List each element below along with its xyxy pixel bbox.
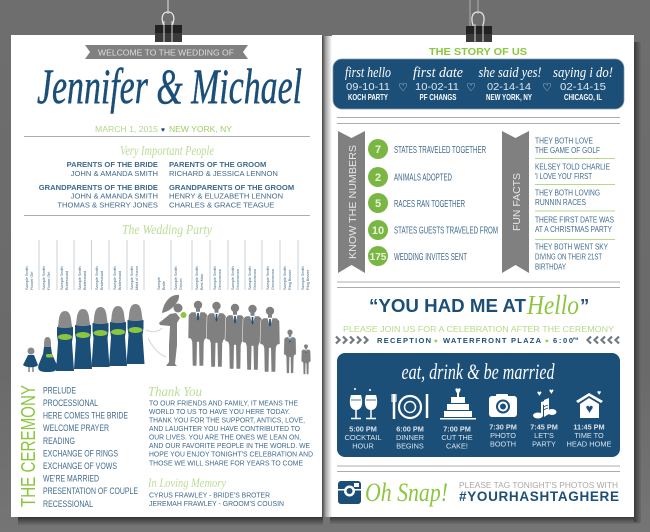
schedule labels: BEGINS xyxy=(396,442,424,450)
schedule labels: PHOTO xyxy=(490,431,516,440)
icon: left binder clip xyxy=(155,0,182,42)
icon: place setting xyxy=(392,394,427,419)
wedding party name columns: Sample Smith xyxy=(130,266,134,290)
fun facts list: 'I LOVE YOU' FIRST xyxy=(535,172,592,181)
text block: thank you message: THOSE WE WILL SHARE FOR YEARS TO COME xyxy=(149,460,303,468)
text block: family names: JOHN & AMANDA SMITH xyxy=(71,192,158,200)
text block: thank you message: TO OUR FRIENDS AND FAMILY, IT MEANS THE xyxy=(149,400,298,408)
timeline panel: NEW YORK, NY xyxy=(486,92,532,102)
text block: memorial names xyxy=(149,492,284,508)
icon: cocktail glasses xyxy=(350,388,377,418)
icon: house with heart xyxy=(576,390,603,418)
reception details: ♥ xyxy=(545,339,549,345)
timeline panel xyxy=(333,59,624,109)
text: celebration invitation: PLEASE JOIN US FOR A CELEBRATION AFTER THE CEREMONY xyxy=(343,324,614,334)
reception details: PM xyxy=(573,337,578,341)
stats list: 2 xyxy=(375,172,381,184)
timeline panel: 10-02-11 xyxy=(415,82,459,93)
fun facts list: THEY BOTH LOVE xyxy=(535,136,593,146)
text block: memorial names: CYRUS FRAWLEY - BRIDE'S BROTER xyxy=(149,492,270,500)
stats list: 175 xyxy=(370,252,387,263)
stats list: STATES TRAVELED TOGETHER xyxy=(394,144,486,156)
wedding party name columns: Maid of Honor xyxy=(135,265,139,290)
text block: thank you message: OUR LIVES. YOU ARE THE ONES WE LEAN ON, xyxy=(149,434,301,442)
text block: family names: JOHN & AMANDA SMITH xyxy=(71,169,158,178)
timeline panel: KOCH PARTY xyxy=(348,92,388,102)
schedule labels: LET'S xyxy=(534,431,554,440)
stats list: 7 xyxy=(375,144,381,156)
banner: fun facts: FUN FACTS xyxy=(511,173,523,231)
stats list: RACES RAN TOGETHER xyxy=(394,198,465,210)
wedding party name columns: Groom xyxy=(179,278,183,290)
list: order of ceremony: EXCHANGE OF VOWS xyxy=(43,461,117,472)
stats list: 10 xyxy=(372,225,384,237)
wedding party name columns: Sample Smith xyxy=(301,266,305,290)
heading: eat, drink and be married: eat, drink & be married xyxy=(402,359,555,384)
list: order of ceremony: PRELUDE xyxy=(43,386,76,396)
timeline panel: 02-14-15 xyxy=(560,82,607,93)
icon: house with heart: ♥ xyxy=(586,401,594,416)
stats list: ANIMALS ADOPTED xyxy=(394,172,452,184)
panel: reception schedule xyxy=(337,353,620,457)
wedding party name columns: Sample Smith xyxy=(195,266,199,290)
schedule labels: BOOTH xyxy=(490,440,516,448)
schedule labels: CAKE! xyxy=(446,442,468,450)
wedding party name columns: Sample Smith xyxy=(113,266,117,290)
fun facts list: RUNNIN RACES xyxy=(535,198,586,207)
wedding party name columns: Sample Smith xyxy=(213,266,217,290)
schedule labels: 11:45 PM xyxy=(573,422,605,432)
text block: thank you message: THANK YOU FOR THE SUPPORT, ANTICS, LOVE, xyxy=(149,418,305,424)
icon: music notes with hearts: ♥ xyxy=(537,389,542,398)
wedding party name columns: Bridesmaid xyxy=(100,271,104,290)
timeline panel: she said yes! xyxy=(478,65,542,81)
reception details xyxy=(336,336,619,345)
text block: family names: PARENTS OF THE BRIDE xyxy=(67,160,158,169)
schedule labels: CUT THE xyxy=(441,433,473,442)
text block: family names: HENRY & ELUZABETH LENNON xyxy=(169,192,283,200)
wedding party name columns: Sample Smith xyxy=(266,266,270,290)
icon: wedding cake xyxy=(440,388,476,420)
icon: house with heart: ♥ xyxy=(597,390,601,397)
list: order of ceremony: EXCHANGE OF RINGS xyxy=(43,448,118,460)
wedding party name columns: Sample Smith xyxy=(231,266,235,290)
wedding party name columns: Groomsman xyxy=(218,269,222,290)
reception details: RECEPTION xyxy=(377,336,431,345)
text: hashtag callout xyxy=(459,481,619,504)
flower girl xyxy=(23,348,38,372)
list: order of ceremony: WELCOME PRAYER xyxy=(43,423,109,434)
icon: music notes with hearts: ♥ xyxy=(549,387,554,396)
timeline panel: 09-10-11 xyxy=(346,82,390,93)
text block: family names: GRANDPARENTS OF THE GROOM xyxy=(169,183,294,192)
timeline panel: ♡ xyxy=(466,82,476,94)
schedule labels: 7:00 PM xyxy=(443,424,471,434)
wedding party name columns: Groomsman xyxy=(271,269,275,290)
reception details: ♥ xyxy=(434,339,438,345)
illustration: wedding party silhouettes xyxy=(23,295,311,374)
timeline panel: saying i do! xyxy=(553,65,613,81)
wedding party name columns: Sample Smith xyxy=(248,266,252,290)
text block: family names: GRANDPARENTS OF THE BRIDE xyxy=(39,183,158,192)
banner: welcome: WELCOME TO THE WEDDING OF xyxy=(98,48,234,58)
timeline panel: CHICAGO, IL xyxy=(564,92,602,102)
banner: know the numbers: KNOW THE NUMBERS xyxy=(347,145,359,259)
icon: right binder clip xyxy=(466,0,492,42)
schedule labels: COCKTAIL xyxy=(344,433,382,442)
wedding party name columns: Bridesmaid xyxy=(65,271,69,290)
fun facts list: THERE FIRST DATE WAS xyxy=(535,216,614,224)
text block: thank you message xyxy=(149,400,313,468)
wedding party name columns: Groomsman xyxy=(236,269,240,290)
ring bearers xyxy=(284,330,311,374)
wedding party name columns: Sample Smith xyxy=(25,266,29,290)
reception details: WATERFRONT PLAZA xyxy=(443,336,542,345)
text block: thank you message: WORLD TO US TO HAVE YOU HERE TODAY. xyxy=(149,409,290,416)
schedule labels: PARTY xyxy=(532,440,556,448)
heading: the ceremony: THE CEREMONY xyxy=(18,385,40,507)
fun facts list: AT A CHRISTMAS PARTY xyxy=(535,225,613,234)
fun facts list: THEY BOTH LOVING xyxy=(535,188,600,198)
list: order of ceremony: WE'RE MARRIED xyxy=(43,474,99,484)
schedule labels: HOUR xyxy=(352,442,374,450)
fun facts list: THEY BOTH WENT SKY xyxy=(535,242,609,252)
text block: memorial names: JEREMAH FRAWLEY - GROOM'S COUSIN xyxy=(149,501,284,508)
text block: thank you message: AND LAUGHTER YOU HAVE CONTRIBUTED TO xyxy=(149,426,301,433)
timeline panel: ♡ xyxy=(398,82,408,94)
text block: family names: CHARLES & GRACE TEAGUE xyxy=(169,200,274,210)
fun facts list: BIRTHDAY xyxy=(535,262,567,272)
wedding party name columns: Ring Bearer xyxy=(288,269,292,290)
wedding party name columns: Bride xyxy=(162,281,166,290)
icon: instagram xyxy=(338,481,361,504)
icon: camera xyxy=(489,394,517,417)
wedding party name columns: Ring Bearer xyxy=(306,269,310,290)
schedule labels xyxy=(344,422,612,450)
list: order of ceremony xyxy=(43,386,138,510)
wedding party name columns: Sample Smith xyxy=(283,266,287,290)
fun facts list xyxy=(535,136,615,272)
groomsmen xyxy=(188,301,280,372)
text block: thank you message: AND OUR FAVORITE PEOPLE IN THE WORLD. WE xyxy=(149,443,310,450)
text block: family names: PARENTS OF THE GROOM xyxy=(169,160,266,169)
wedding party name columns: Sample Smith xyxy=(42,266,46,290)
heading: very important people: Very Important People xyxy=(120,144,214,159)
wedding party name columns: Sample Smith xyxy=(60,266,64,290)
wedding party name columns: Groomsman xyxy=(253,269,257,290)
timeline panel: ♡ xyxy=(542,82,552,94)
wedding party name columns: Flower Girl xyxy=(30,271,34,290)
stats list: STATES GUESTS TRAVELED FROM xyxy=(394,224,498,236)
list: order of ceremony: READING xyxy=(43,436,75,447)
text: oh snap: Oh Snap! xyxy=(365,478,448,507)
banner: know the numbers xyxy=(338,131,365,273)
reception details: 6:00 xyxy=(553,336,573,345)
wedding party name columns: Best Man xyxy=(200,274,204,290)
panel: ceremony program xyxy=(11,0,322,517)
quote: you had me at hello: “YOU HAD ME AT xyxy=(369,295,527,316)
timeline panel: first hello xyxy=(345,65,391,81)
date and location: ♥ xyxy=(161,127,165,134)
wedding party name columns xyxy=(25,240,310,290)
text block: family names xyxy=(39,160,294,210)
wedding party name columns: Sample Smith xyxy=(78,266,82,290)
schedule labels: 7:30 PM xyxy=(489,422,517,432)
list: order of ceremony: PRESENTATION OF COUPLE xyxy=(43,486,138,497)
fun facts list: DIVING ON THEIR 21ST xyxy=(535,252,602,262)
wedding party name columns: Bridesmaid xyxy=(118,271,122,290)
junior bridesmaid xyxy=(38,337,57,372)
schedule labels: TIME TO xyxy=(574,431,604,440)
list: order of ceremony: RECESSIONAL xyxy=(43,499,93,510)
stats list: 5 xyxy=(375,198,381,210)
schedule labels: 7:45 PM xyxy=(530,422,558,432)
heading: thank you: Thank You xyxy=(148,385,202,400)
timeline panel: 02-14-14 xyxy=(487,82,531,93)
schedule labels: DINNER xyxy=(396,433,424,442)
date and location xyxy=(95,124,232,134)
wedding party name columns: Flower Girl xyxy=(47,271,51,290)
stats list: WEDDING INVITES SENT xyxy=(394,251,467,263)
stats list xyxy=(368,139,498,266)
icon: music notes with hearts xyxy=(533,387,556,418)
banner: fun facts xyxy=(502,131,529,273)
quote: you had me at hello xyxy=(369,290,589,320)
wedding party name columns: Sample Smith xyxy=(174,266,178,290)
list: order of ceremony: PROCESSIONAL xyxy=(43,398,98,409)
heading: the story of us: THE STORY OF US xyxy=(429,46,527,58)
bride and groom xyxy=(146,295,186,366)
list: order of ceremony: HERE COMES THE BRIDE xyxy=(43,410,128,422)
banner: welcome xyxy=(85,45,248,59)
wedding party name columns: Bridesmaid xyxy=(83,271,87,290)
wedding party name columns: Sample xyxy=(157,277,161,290)
title: couple names: Jennifer & Michael xyxy=(37,58,302,114)
date and location: MARCH 1, 2015 xyxy=(95,124,158,134)
quote: you had me at hello: ” xyxy=(580,295,589,316)
heading: in loving memory: In Loving Memory xyxy=(147,475,226,490)
text block: thank you message: HOPE YOU ENJOY TONIGHT'S CELEBRATION AND xyxy=(149,452,313,458)
text block: family names: THOMAS & SHERRY JONES xyxy=(57,200,158,210)
schedule labels: 5:00 PM xyxy=(349,424,377,434)
fun facts list: KELSEY TOLD CHARLIE xyxy=(535,162,610,172)
quote: you had me at hello: Hello xyxy=(526,290,579,320)
date and location: NEW YORK, NY xyxy=(169,124,232,134)
panel: story and reception xyxy=(332,0,634,517)
fun facts list: THE GAME OF GOLF xyxy=(535,146,600,155)
bridesmaids xyxy=(56,304,144,371)
schedule labels: HEAD HOME xyxy=(566,440,612,448)
timeline panel: first date xyxy=(413,65,463,81)
heading: the wedding party: The Wedding Party xyxy=(122,223,213,238)
wedding party name columns: Sample Smith xyxy=(95,266,99,290)
text block: family names: RICHARD & JESSICA LENNON xyxy=(169,169,278,178)
text: hashtag callout: #YOURHASHTAGHERE xyxy=(459,489,619,504)
timeline panel: PF CHANGS xyxy=(420,92,457,102)
schedule labels: 6:00 PM xyxy=(396,424,424,434)
text: hashtag callout: PLEASE TAG TONIGHT'S PHOTOS WITH xyxy=(459,481,618,490)
